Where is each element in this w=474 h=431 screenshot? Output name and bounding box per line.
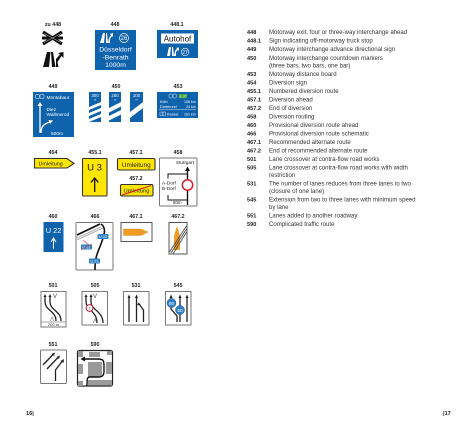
- sign: 458: 80m: [173, 200, 182, 205]
- sign: 449: Montabaur: [46, 95, 70, 101]
- sign: 450: [89, 84, 143, 122]
- sign: 450: m: [94, 98, 97, 102]
- sign: 505: Λ: [93, 319, 97, 325]
- sign: 457.2: Umleitung: [123, 188, 150, 194]
- legend list: 501: [247, 157, 256, 163]
- sign: 448.1: Autohof: [164, 34, 192, 44]
- sign: 458: 458: [174, 150, 182, 156]
- sign: 466: U 21: [90, 260, 99, 264]
- legend list: 455.1: [247, 89, 261, 95]
- legend list: by lane: [269, 205, 289, 211]
- sign: 448.1: [157, 22, 198, 58]
- sign: 457.1: 457.1: [129, 150, 143, 156]
- legend list: 466: [247, 132, 256, 138]
- sign: 453: 453: [174, 84, 182, 90]
- legend list: 590: [247, 222, 256, 228]
- sign: 455.1: [82, 150, 107, 196]
- sign: 454: 454: [49, 150, 57, 156]
- sign: 501: [41, 283, 66, 327]
- legend list: End of recommended alternate route: [269, 148, 368, 154]
- sign: 501: Λ: [50, 317, 54, 323]
- sign: 501: V: [53, 294, 57, 300]
- sign: 453: Kassel: [167, 112, 179, 116]
- legend list: 467.1: [247, 140, 261, 146]
- legend list: Diversion ahead: [269, 98, 313, 104]
- sign: 460: 460: [49, 214, 57, 220]
- sign: 450: m: [135, 98, 138, 102]
- sign: 505: V: [93, 294, 97, 300]
- sign: 454: [34, 150, 74, 168]
- page number right: |17: [443, 411, 451, 417]
- sign: 457.2: [120, 176, 153, 196]
- legend list: 551: [247, 214, 256, 220]
- legend list: 467.2: [247, 148, 261, 154]
- sign: 501: 501: [49, 283, 57, 289]
- legend list: Motorway interchange countdown markers: [269, 56, 383, 62]
- sign: 448.1: 27: [182, 50, 188, 56]
- legend list: Recommended alternate route: [269, 140, 351, 146]
- legend list: [247, 30, 416, 228]
- sign: 449: [33, 84, 74, 137]
- legend list: 460: [247, 123, 256, 129]
- sign: 501: 200 m: [48, 322, 60, 327]
- sign: 458: A-Dorf: [162, 180, 177, 186]
- sign: 505: 505: [91, 283, 99, 289]
- legend list: Lane crossover at contra-flow road works: [269, 157, 380, 163]
- sign: 448: 448: [111, 22, 119, 28]
- legend list: Motorway distance board: [269, 72, 337, 78]
- sign: 545: 545: [174, 283, 182, 289]
- legend list: 505: [247, 166, 256, 172]
- legend list: Motorway interchange advance directional sign: [269, 47, 395, 53]
- legend list: Complicated traffic route: [269, 222, 335, 228]
- sign: 450: m: [114, 98, 117, 102]
- sign: zu 448: zu 448: [45, 22, 61, 28]
- sign: 467.1: 467.1: [129, 214, 143, 220]
- sign: 457.1: [118, 150, 155, 170]
- sign: 449: Wallmerod: [46, 112, 70, 118]
- sign: 449: 449: [49, 84, 57, 90]
- legend list: Provisional diversion route schematic: [269, 132, 369, 138]
- sign: 454: Umleitung: [38, 162, 63, 168]
- sign: 448: 26: [121, 36, 128, 42]
- sign: 460: U 22: [46, 226, 61, 235]
- sign: 545: 50: [177, 308, 183, 314]
- sign: 458: [160, 150, 197, 206]
- sign: 466: U 21: [82, 246, 91, 250]
- sign: 466: U 22: [99, 235, 107, 239]
- sign: 545: [166, 283, 191, 325]
- sign: 457.1: Umleitung: [122, 162, 151, 169]
- sign: 460: [44, 214, 64, 252]
- legend list: 449: [247, 47, 256, 53]
- sign: 505: [82, 283, 108, 325]
- legend list: The number of lanes reduces from three lanes to two: [269, 182, 411, 188]
- sign: 453: Dortmund: [160, 105, 177, 109]
- legend list: End of diversion: [269, 106, 312, 112]
- sign: 453: 24 km: [186, 105, 196, 109]
- sign: 590: [78, 342, 112, 386]
- sign: 449: Diez: [46, 107, 57, 113]
- legend list: Motorway exit, four or three-way interchange ahead: [269, 30, 407, 36]
- sign: 458: Stuttgart: [176, 160, 195, 166]
- page number left: 16|: [26, 411, 34, 417]
- sign: 505: 2: [88, 306, 90, 310]
- legend list: 458: [247, 114, 256, 120]
- legend list: 457.2: [247, 106, 261, 112]
- legend list: 450: [247, 56, 256, 62]
- sign: 450: 100: [133, 93, 141, 98]
- sign: 551: 551: [49, 342, 57, 348]
- sign: 448: Düsseldorf: [99, 46, 132, 54]
- legend list: Numbered diversion route: [269, 89, 339, 95]
- sign: 450: 200: [111, 93, 119, 98]
- sign: 531: [124, 283, 149, 325]
- sign: 455.1: 455.1: [88, 150, 102, 156]
- sign: 458: B-Dorf: [162, 186, 177, 192]
- legend list: 448.1: [247, 38, 261, 44]
- legend list: Lane crossover at contra-flow road works with width: [269, 166, 408, 172]
- legend list: 457.1: [247, 98, 261, 104]
- sign: 466: [76, 214, 113, 270]
- sign: 453: Köln: [160, 100, 168, 104]
- sign: 545: 80: [169, 301, 174, 307]
- legend list: restriction: [269, 173, 295, 179]
- sign: 467.2: 467.2: [171, 214, 185, 220]
- sign: 531: 531: [132, 283, 140, 289]
- legend list: 454: [247, 80, 257, 86]
- legend list: Lanes added to another roadway: [269, 214, 358, 220]
- sign: 457.2: 457.2: [129, 176, 143, 182]
- sign: 453: [157, 84, 198, 118]
- legend list: Provisional diversion route ahead: [269, 123, 358, 129]
- sign: 590: 590: [91, 342, 99, 348]
- legend list: 531: [247, 182, 256, 188]
- sign: 453: 106 km: [184, 100, 196, 104]
- sign: 453: E 37: [180, 94, 187, 98]
- legend list: 448: [247, 30, 256, 36]
- sign: 448: 1000m: [105, 62, 126, 69]
- sign: zu 448: [42, 22, 64, 67]
- legend list: (three bars, two bars, one bar): [269, 64, 350, 70]
- legend list: Diversion sign: [269, 80, 307, 86]
- legend list: 545: [247, 198, 256, 204]
- legend list: 453: [247, 72, 256, 78]
- sign: 448: [95, 22, 136, 70]
- sign: 466: 466: [91, 214, 99, 220]
- sign: 467.1: [121, 214, 152, 242]
- sign: 450: 450: [112, 84, 120, 90]
- sign: 450: 300: [91, 93, 99, 98]
- sign: 449: 500m: [51, 131, 63, 137]
- legend list: (closure of one lane): [269, 189, 324, 195]
- legend list: Sign indicating off-motorway truck stop: [269, 38, 373, 44]
- sign: 467.2: [169, 214, 187, 254]
- sign: 453: 161 km: [184, 112, 196, 116]
- sign: 448: -Benrath: [102, 54, 129, 62]
- legend list: Diversion routing: [269, 114, 314, 120]
- legend list: Extension from two to three lanes with minimum speed: [269, 198, 416, 204]
- sign: 455.1: U 3: [87, 162, 102, 174]
- sign: 448.1: 448.1: [170, 22, 184, 28]
- sign: 551: [40, 342, 66, 384]
